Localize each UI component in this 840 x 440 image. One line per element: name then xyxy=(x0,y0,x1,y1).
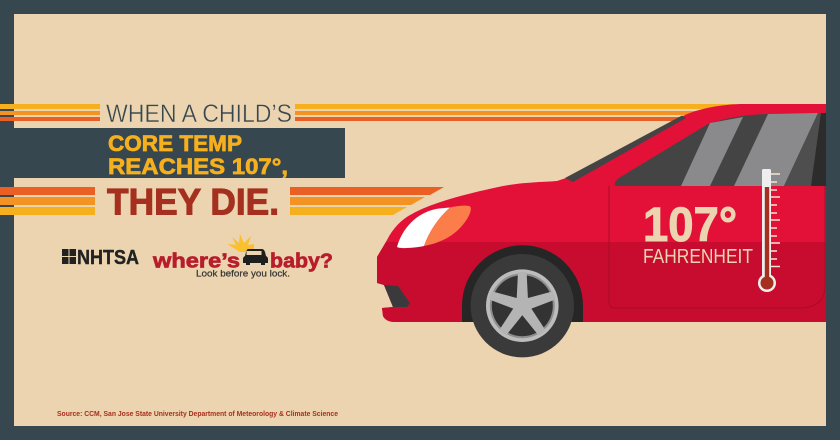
heading: when a child's: WHEN A CHILD’S xyxy=(106,100,292,128)
windshield edge xyxy=(565,116,686,182)
door outline xyxy=(609,186,825,308)
logo: where's baby: Look before you lock. xyxy=(196,268,290,278)
temperature unit: FAHRENHEIT xyxy=(643,246,753,268)
heading: they die: THEY DIE. xyxy=(107,182,279,222)
lower speed stripes xyxy=(0,187,444,215)
logo: where's baby xyxy=(152,234,333,278)
heading: core temp reaches 107 xyxy=(108,131,288,179)
icon: car front xyxy=(243,249,268,265)
grille xyxy=(384,285,410,307)
lower body shade xyxy=(377,242,826,322)
headlight xyxy=(397,206,471,248)
heading: core temp reaches 107: REACHES 107°, xyxy=(108,154,288,179)
wheel xyxy=(471,254,574,357)
icon: sun xyxy=(227,234,254,252)
logo: where's baby: baby? xyxy=(270,250,333,272)
thermometer xyxy=(758,169,780,292)
upper speed stripes xyxy=(0,104,735,121)
temperature value: 107° xyxy=(643,199,737,252)
heading: core temp reaches 107: CORE TEMP xyxy=(108,131,242,156)
source note: Source: CCM, San Jose State University Department of Meteorology & Climate Science xyxy=(57,411,338,418)
logo: NHTSA: NHTSA xyxy=(77,247,139,269)
car illustration xyxy=(377,104,826,357)
wheel arch xyxy=(462,245,583,322)
logo: where's baby: where’s xyxy=(152,250,240,272)
panel: dark heading band xyxy=(14,128,345,178)
side window xyxy=(615,113,826,186)
car body xyxy=(377,104,826,322)
